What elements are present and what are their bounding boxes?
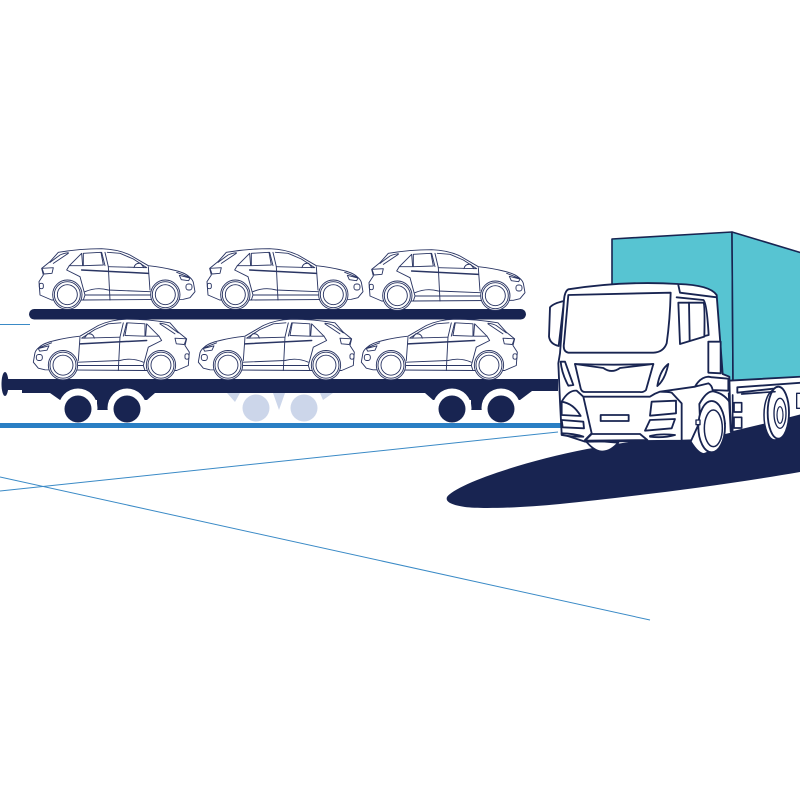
right vents [645, 401, 676, 437]
deck beam [8, 379, 558, 410]
bumper and fenders [562, 387, 695, 441]
truck shadow [447, 405, 800, 508]
trailer wheels [64, 396, 514, 422]
front underside wheel [585, 440, 618, 452]
grille [575, 364, 653, 392]
box front face [612, 232, 733, 381]
cab body [558, 283, 731, 442]
ghost wheels behind the trailer [227, 393, 333, 422]
windshield [564, 293, 671, 353]
truck [549, 283, 800, 454]
wheel cutouts [58, 388, 520, 428]
mirror [549, 301, 564, 346]
rear wheel [764, 387, 789, 440]
car: bottom right [361, 319, 517, 380]
rear chassis [728, 377, 800, 433]
thin blue perspective lines [0, 324, 650, 620]
left vents [562, 402, 584, 437]
headlight slits [561, 362, 668, 386]
hitch [2, 372, 8, 396]
side window [677, 297, 709, 344]
car: top right [369, 250, 525, 310]
box side face [732, 232, 800, 381]
upper car deck [29, 309, 526, 320]
car: top middle [207, 249, 363, 309]
fender top panel [695, 377, 728, 391]
ground line [0, 423, 562, 428]
car: bottom left [33, 319, 189, 380]
car: bottom middle [198, 319, 354, 380]
top row cars [39, 249, 525, 310]
car: top left [39, 249, 195, 309]
front wheel [691, 401, 725, 454]
roof line [678, 285, 717, 297]
bottom row cars [33, 319, 517, 380]
lower trailer deck with wheels [2, 372, 558, 428]
side panel [708, 342, 721, 373]
cargo box [612, 232, 800, 381]
wheel arch [699, 391, 732, 437]
number plate [601, 415, 629, 421]
steps [729, 392, 775, 432]
